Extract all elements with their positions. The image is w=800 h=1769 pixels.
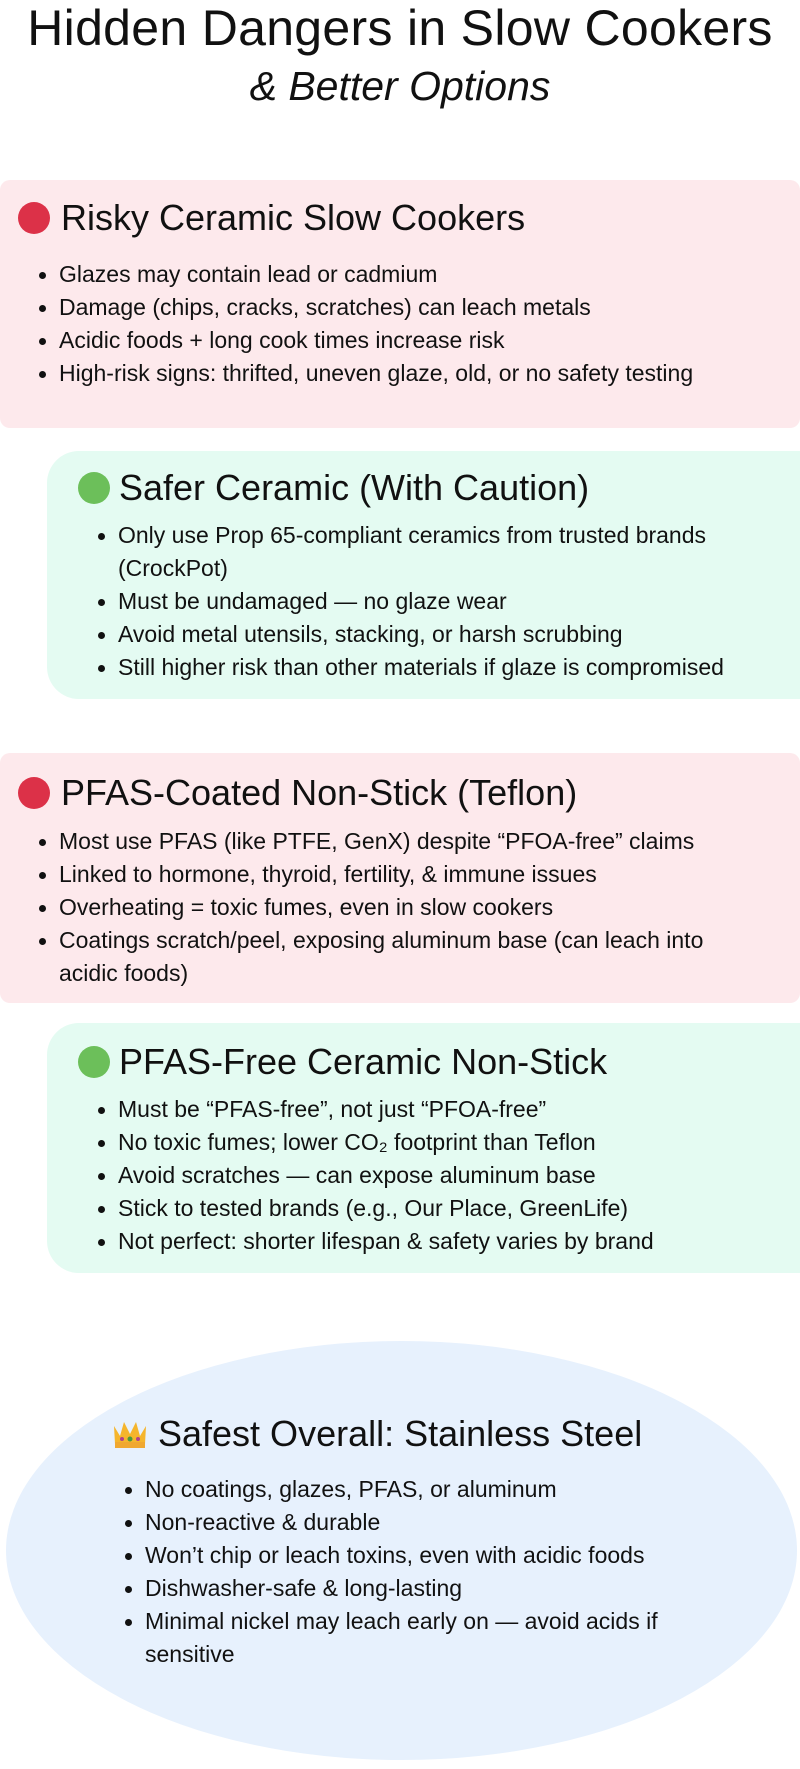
- panel: risky ceramic: [0, 180, 800, 428]
- heading: stainless steel: Safest Overall: Stainless Steel: [158, 1413, 642, 1454]
- panel: safer ceramic: [47, 451, 800, 699]
- icon: green circle: [78, 472, 110, 504]
- icon: green circle: [78, 1046, 110, 1078]
- icon: red circle: [18, 777, 50, 809]
- bullet list: safer ceramic: Still higher risk than other materials if glaze is compromised: [118, 654, 724, 680]
- bullet list: PFAS-free: Must be “PFAS-free”, not just “PFOA-free”: [118, 1096, 546, 1122]
- bullet list: stainless steel: sensitive: [145, 1641, 234, 1667]
- bullet list: safer ceramic: Must be undamaged — no glaze wear: [118, 588, 507, 614]
- panel: PFAS-free ceramic: [47, 1023, 800, 1273]
- icon: red circle: [18, 202, 50, 234]
- bullet list: PFAS: Overheating = toxic fumes, even in slow cookers: [59, 894, 553, 920]
- bullet list: safer ceramic: [98, 522, 724, 680]
- bullet list: PFAS: [39, 828, 703, 986]
- bullet list: stainless steel: Minimal nickel may leach early on — avoid acids if: [145, 1608, 658, 1634]
- heading: safer ceramic: Safer Ceramic (With Caution): [119, 467, 589, 508]
- bullet list: PFAS-free: [98, 1096, 654, 1254]
- bullet list: PFAS-free: Stick to tested brands (e.g., Our Place, GreenLife): [118, 1195, 628, 1221]
- bullet list: stainless steel: [125, 1476, 658, 1667]
- bullet list: PFAS-free: Not perfect: shorter lifespan & safety varies by brand: [118, 1228, 654, 1254]
- bullet list: stainless steel: Won’t chip or leach toxins, even with acidic foods: [145, 1542, 644, 1568]
- bullet list: risky ceramic: High-risk signs: thrifted, uneven glaze, old, or no safety testing: [59, 360, 693, 386]
- bullet list: risky ceramic: [39, 261, 693, 386]
- bullet list: risky ceramic: Acidic foods + long cook times increase risk: [59, 327, 505, 353]
- bullet list: stainless steel: Non-reactive & durable: [145, 1509, 380, 1535]
- bullet list: safer ceramic: (CrockPot): [118, 555, 228, 581]
- bullet list: PFAS: Most use PFAS (like PTFE, GenX) despite “PFOA-free” claims: [59, 828, 694, 854]
- panel: stainless steel ellipse: [6, 1341, 797, 1760]
- bullet list: PFAS-free: No toxic fumes; lower CO₂ footprint than Teflon: [118, 1129, 596, 1155]
- panel: PFAS non-stick: [0, 753, 800, 1003]
- heading: risky ceramic: Risky Ceramic Slow Cookers: [61, 197, 525, 238]
- bullet list: stainless steel: Dishwasher-safe & long-lasting: [145, 1575, 462, 1601]
- bullet list: PFAS: Coatings scratch/peel, exposing aluminum base (can leach into: [59, 927, 703, 953]
- bullet list: safer ceramic: Only use Prop 65-compliant ceramics from trusted brands: [118, 522, 706, 548]
- title: Hidden Dangers in Slow Cookers: [27, 0, 773, 56]
- bullet list: risky ceramic: Glazes may contain lead or cadmium: [59, 261, 437, 287]
- bullet list: PFAS: Linked to hormone, thyroid, fertility, & immune issues: [59, 861, 597, 887]
- bullet list: safer ceramic: Avoid metal utensils, stacking, or harsh scrubbing: [118, 621, 623, 647]
- bullet list: stainless steel: No coatings, glazes, PFAS, or aluminum: [145, 1476, 557, 1502]
- bullet list: PFAS: acidic foods): [59, 960, 188, 986]
- bullet list: PFAS-free: Avoid scratches — can expose aluminum base: [118, 1162, 596, 1188]
- icon: crown: [114, 1422, 146, 1448]
- subtitle: & Better Options: [250, 63, 550, 109]
- heading: PFAS-free: PFAS-Free Ceramic Non-Stick: [119, 1041, 607, 1082]
- heading: PFAS: PFAS-Coated Non-Stick (Teflon): [61, 772, 577, 813]
- bullet list: risky ceramic: Damage (chips, cracks, scratches) can leach metals: [59, 294, 591, 320]
